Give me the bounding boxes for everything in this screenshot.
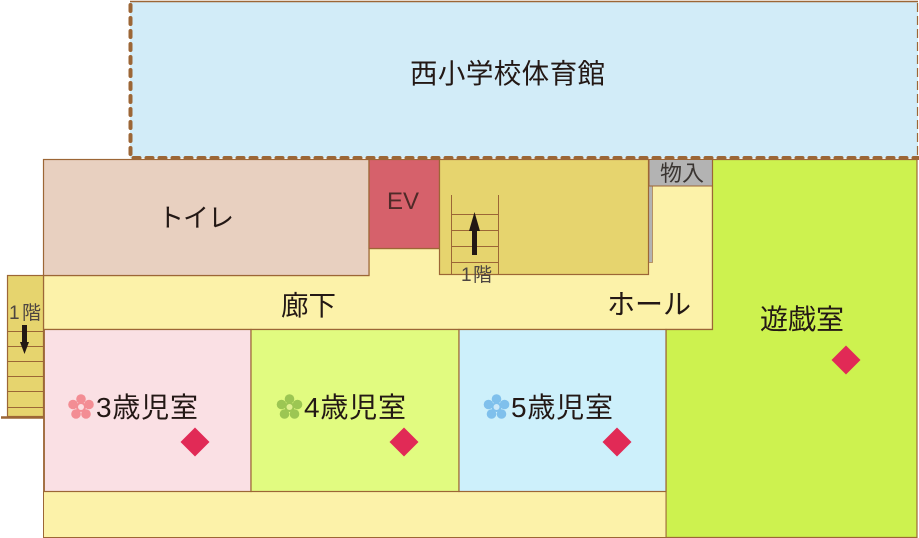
panel: elevator: EV [387,188,419,215]
icon: flower [277,394,302,419]
icon: flower [68,394,94,419]
panel: hallway and hall: ホール [607,289,691,320]
panel: left stairs [1,276,44,491]
panel: storage [649,160,712,186]
icon: diamond marker [602,428,632,456]
panel: playroom [666,160,917,538]
panel: storage: 物入 [660,161,704,186]
panel: gymnasium [130,1,918,158]
icon: flower [484,394,509,419]
icon: diamond marker [180,428,210,456]
panel: hallway and hall: 廊下 [281,290,336,321]
stairs label: 1階 [461,264,492,286]
arrow: down [20,325,29,354]
panel: gymnasium: 西小学校体育館 [410,58,605,89]
panel: 3 year olds room [44,330,251,492]
panel: toilet: トイレ [158,203,234,233]
panel: central stairs [440,160,648,286]
panel: 4 year olds room: 4歳児室 [304,392,406,423]
arrow: up [469,212,480,255]
panel: gray wall strip [648,186,652,262]
panel: 4 year olds room [251,330,459,492]
panel: hallway and hall [44,160,712,330]
panel: toilet [44,160,369,276]
panel: 3 year olds room: 3歳児室 [96,392,198,423]
stairs label: 1階 [9,302,41,324]
panel: playroom: 遊戯室 [760,304,844,335]
icon: diamond marker [832,346,860,374]
panel: 5 year olds room [459,330,666,492]
panel: 5 year olds room: 5歳児室 [511,392,613,423]
icon: diamond marker [390,428,418,456]
panel: bottom corridor [44,492,666,538]
panel: elevator [369,160,440,248]
